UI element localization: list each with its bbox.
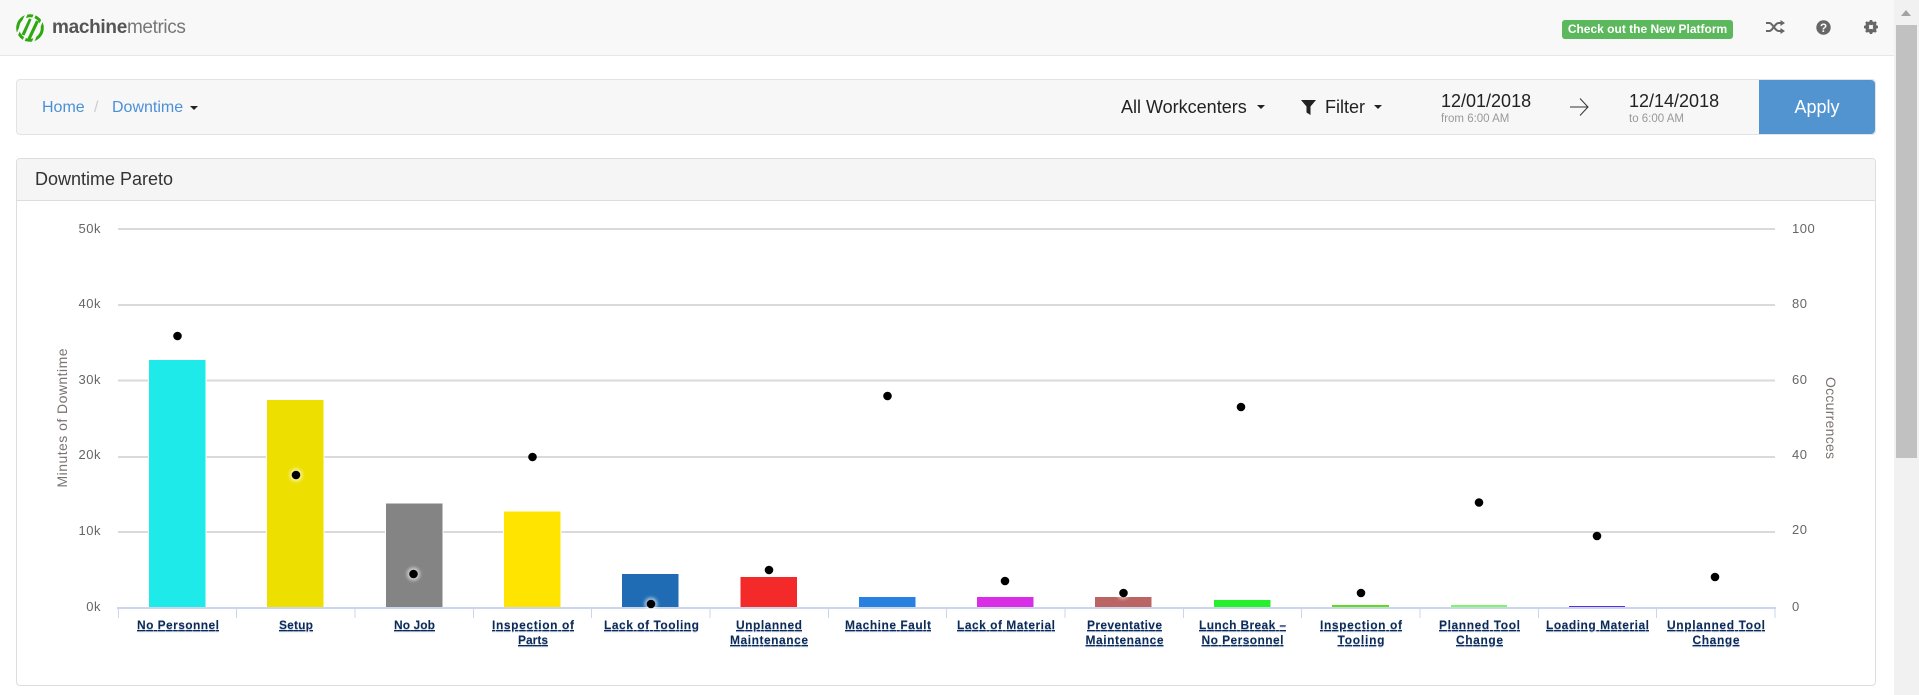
icon: filter funnel xyxy=(1301,100,1316,115)
right axis title: Occurrences xyxy=(1823,377,1839,459)
category labels: Machine Fault xyxy=(845,618,931,632)
category labels: Unplanned xyxy=(736,618,802,632)
apply button xyxy=(1759,80,1875,134)
icon: help: ? xyxy=(1820,21,1827,35)
caret: workcenters xyxy=(1257,105,1265,109)
category labels: Inspection of xyxy=(492,618,575,632)
logo wordmark: machinemetrics xyxy=(52,17,185,38)
right axis labels xyxy=(1792,221,1815,614)
new platform button xyxy=(1562,20,1733,39)
occurrence dot halos xyxy=(290,468,1129,610)
category labels: Lunch Break – xyxy=(1199,618,1286,632)
left axis labels xyxy=(79,221,101,614)
panel heading xyxy=(17,159,1875,201)
caret: filter xyxy=(1374,105,1382,109)
breadcrumb: home: Home xyxy=(42,99,85,116)
scrollbar thumb xyxy=(1896,25,1917,458)
category labels: Lack of Tooling xyxy=(604,618,699,632)
category labels: Change xyxy=(1456,633,1503,647)
scrollbar xyxy=(1894,0,1919,695)
scrollbar up arrow xyxy=(1901,10,1911,16)
start time: from 6:00 AM xyxy=(1441,113,1509,125)
right axis labels: 40 xyxy=(1792,447,1807,462)
category labels: Preventative xyxy=(1087,618,1162,632)
category labels: Planned Tool xyxy=(1439,618,1520,632)
icon: machinemetrics logo xyxy=(16,14,44,42)
left axis labels: 30k xyxy=(79,372,101,387)
icon: help xyxy=(1816,20,1831,35)
breadcrumb: downtime dropdown: Downtime xyxy=(112,99,183,116)
category labels: Maintenance xyxy=(730,633,808,647)
right axis labels: 20 xyxy=(1792,522,1807,537)
left axis labels: 0k xyxy=(86,599,101,614)
apply button: Apply xyxy=(1794,97,1840,117)
filter dropdown: Filter xyxy=(1325,97,1365,117)
left axis labels: 40k xyxy=(79,296,101,311)
left axis labels: 20k xyxy=(79,447,101,462)
category labels: No Job xyxy=(394,618,435,632)
icon: arrow between dates xyxy=(1570,98,1589,116)
category labels: No Personnel xyxy=(1202,633,1284,647)
category labels xyxy=(137,618,1765,647)
panel heading: Downtime Pareto xyxy=(35,169,173,189)
category labels: Parts xyxy=(518,633,548,647)
left axis title: Minutes of Downtime xyxy=(54,348,70,488)
category labels: Maintenance xyxy=(1086,633,1164,647)
caret: downtime xyxy=(190,106,198,110)
filter toolbar panel xyxy=(16,79,1876,135)
top navigation bar xyxy=(0,0,1894,56)
new platform button: Check out the New Platform xyxy=(1568,22,1727,36)
bars xyxy=(148,360,1271,608)
icon: settings gear xyxy=(1864,20,1878,34)
icon: shuffle xyxy=(1766,20,1785,34)
right axis labels: 80 xyxy=(1792,296,1807,311)
category labels: Tooling xyxy=(1338,633,1384,647)
category labels: Change xyxy=(1692,633,1740,647)
left axis labels: 10k xyxy=(79,523,101,538)
category labels: No Personnel xyxy=(137,618,219,632)
start date: 12/01/2018 xyxy=(1441,91,1531,111)
category labels: Inspection of xyxy=(1320,618,1403,632)
left axis labels: 50k xyxy=(79,221,101,236)
category labels: Loading Material xyxy=(1546,618,1649,632)
category labels: Setup xyxy=(279,618,313,632)
category labels: Unplanned Tool xyxy=(1667,618,1765,632)
right axis labels: 100 xyxy=(1792,221,1815,236)
x axis line and ticks xyxy=(117,608,1776,618)
category labels: Lack of Material xyxy=(957,618,1055,632)
panel: downtime pareto xyxy=(16,158,1876,686)
breadcrumb separator: / xyxy=(94,99,98,116)
workcenters dropdown: All Workcenters xyxy=(1121,97,1247,117)
end time: to 6:00 AM xyxy=(1629,113,1684,125)
right axis labels: 0 xyxy=(1792,599,1800,614)
right axis labels: 60 xyxy=(1792,372,1807,387)
occurrence dots xyxy=(173,332,1719,608)
end date: 12/14/2018 xyxy=(1629,91,1719,111)
